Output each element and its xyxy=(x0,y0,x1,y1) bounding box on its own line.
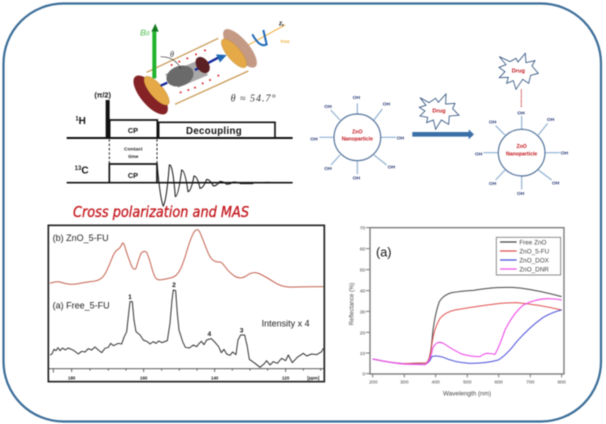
1H label: 1 xyxy=(75,117,79,123)
x axis xyxy=(49,369,324,373)
gray sample tube xyxy=(165,62,208,88)
peak numbers xyxy=(128,282,244,338)
spectrum frame xyxy=(48,225,324,382)
right OH labels: OH xyxy=(489,119,497,125)
x axis labels: 600 xyxy=(494,379,503,385)
right nanoparticle spokes xyxy=(483,116,560,189)
13C CP box xyxy=(109,164,157,183)
x axis labels: [ppm] xyxy=(307,375,320,380)
left nanoparticle circle xyxy=(334,114,381,161)
FID signal xyxy=(157,165,270,206)
black free 5-FU trace xyxy=(50,290,323,367)
x axis labels: 180 xyxy=(68,375,76,380)
peak numbers: 3 xyxy=(240,327,244,334)
contact time label: Contact xyxy=(124,146,143,152)
pi/2 label: (π/2) xyxy=(94,90,111,99)
peak numbers: 4 xyxy=(207,331,211,338)
right OH labels: OH xyxy=(552,180,560,186)
right nanoparticle label: ZnO xyxy=(516,144,527,150)
pulse sequence xyxy=(67,90,293,206)
x axis labels: 700 xyxy=(526,379,535,385)
right OH labels: OH xyxy=(547,117,555,123)
legend: ZnO_DNR xyxy=(519,266,549,273)
coil dots xyxy=(171,49,219,93)
B0 label: B0 xyxy=(140,28,150,38)
CP label upper: CP xyxy=(128,126,138,135)
right nanoparticle circle xyxy=(498,129,545,176)
x axis labels: 500 xyxy=(463,379,472,385)
y axis labels xyxy=(360,226,366,378)
left end cap xyxy=(128,70,174,120)
green B0 arrow xyxy=(148,32,160,78)
theta label: θ xyxy=(170,50,174,59)
rotation arrow xyxy=(252,30,267,45)
contact time guide lines xyxy=(109,139,157,164)
left nanoparticle spokes xyxy=(319,103,396,174)
x axis labels: 400 xyxy=(431,379,440,385)
right OH labels: OH xyxy=(517,191,525,197)
y axis labels: 20 xyxy=(360,330,366,336)
left nanoparticle label: ZnO xyxy=(352,129,362,135)
peak numbers: 1 xyxy=(128,294,132,301)
ZnO DNR curve xyxy=(373,299,562,365)
theta arc xyxy=(161,57,181,69)
magic angle value: θ ≈ 54.7° xyxy=(231,94,276,105)
axis ticks xyxy=(366,228,562,377)
right drug starburst xyxy=(499,53,538,89)
block arrow xyxy=(412,129,474,139)
y axis labels: 0 xyxy=(363,372,366,378)
right nanoparticle label: Nanoparticle xyxy=(506,151,537,157)
red title: Cross polarization and MAS xyxy=(73,203,249,221)
Free ZnO curve xyxy=(373,287,562,364)
x axis labels xyxy=(68,375,320,380)
red ZnO 5-FU trace xyxy=(50,230,323,287)
right inner disc xyxy=(217,35,251,71)
ZnO 5-FU curve xyxy=(373,303,562,364)
left drug starburst xyxy=(419,94,459,129)
13C label: 13 xyxy=(75,166,82,172)
x axis labels: 120 xyxy=(282,375,290,380)
legend: ZnO_5-FU xyxy=(519,248,550,255)
trace label b: (b) ZnO_5-FU xyxy=(53,233,109,243)
left OH labels: OH xyxy=(353,176,360,182)
contact time label: time xyxy=(128,154,139,160)
x axis title: Wavelength (nm) xyxy=(443,390,491,397)
1H baseline xyxy=(67,135,293,141)
y axis labels: 40 xyxy=(360,289,366,295)
right OH labels xyxy=(475,110,568,197)
blue arrow head xyxy=(216,54,227,62)
axis label: z, xyxy=(278,19,284,28)
x axis labels: 200 xyxy=(369,379,378,385)
y axis labels: 10 xyxy=(360,351,366,357)
y axis labels: 50 xyxy=(360,268,366,274)
decoupling box xyxy=(159,122,275,138)
y axis labels: 30 xyxy=(360,309,366,315)
green arrow head xyxy=(151,24,159,32)
axis line xyxy=(248,25,285,45)
CP label lower: CP xyxy=(128,171,138,180)
pi/2 pulse xyxy=(106,100,110,138)
right OH labels: OH xyxy=(489,181,497,187)
blue rotor axis xyxy=(161,57,220,86)
left OH labels: OH xyxy=(383,102,390,108)
x axis labels: 140 xyxy=(211,375,219,380)
y axis labels: 60 xyxy=(360,247,366,253)
left nanoparticle label: Nanoparticle xyxy=(342,137,373,143)
decoupling label: Decoupling xyxy=(186,126,242,137)
legend: Free ZnO xyxy=(519,239,546,246)
legend: ZnO_DOX xyxy=(519,257,550,264)
dark rotor ring xyxy=(193,54,213,76)
x axis labels: 800 xyxy=(557,379,566,385)
NMR spectrum xyxy=(48,225,324,382)
rotation speed label: vrot xyxy=(280,38,290,45)
reflectance chart xyxy=(349,226,566,397)
x axis labels: 160 xyxy=(140,375,148,380)
x axis labels: 300 xyxy=(400,379,409,385)
lower double arrow xyxy=(175,71,248,104)
1H CP box xyxy=(110,120,157,138)
x axis labels xyxy=(369,379,566,385)
ZnO diagram xyxy=(310,53,568,197)
y axis title: Reflectance (%) xyxy=(349,283,355,325)
13C baseline xyxy=(67,180,293,185)
panel letter: (a) xyxy=(376,246,391,260)
left OH labels: OH xyxy=(388,165,395,171)
left OH labels: OH xyxy=(397,135,404,141)
right OH labels: OH xyxy=(475,151,483,157)
right OH labels: OH xyxy=(517,110,525,116)
13C label: C xyxy=(81,165,89,176)
left OH labels xyxy=(310,95,404,182)
ZnO DOX curve xyxy=(373,310,562,364)
y axis labels: 70 xyxy=(360,226,366,232)
plot frame xyxy=(370,228,564,374)
1H label: H xyxy=(79,116,86,127)
right end cap xyxy=(218,24,262,72)
left OH labels: OH xyxy=(310,136,318,142)
peak numbers: 2 xyxy=(172,282,176,289)
intensity label: Intensity x 4 xyxy=(262,318,310,328)
left drug label: Drug xyxy=(432,109,446,115)
left OH labels: OH xyxy=(324,104,332,110)
left OH labels: OH xyxy=(353,95,360,101)
dotted bond xyxy=(520,89,523,107)
legend xyxy=(496,237,561,275)
gray sample xyxy=(163,62,197,90)
left inner disc xyxy=(140,73,173,109)
right OH labels: OH xyxy=(561,151,568,157)
MAS rotor diagram xyxy=(128,19,290,120)
trace label a: (a) Free_5-FU xyxy=(53,300,110,310)
upper double arrow xyxy=(147,38,218,72)
left OH labels: OH xyxy=(324,166,332,172)
right drug label: Drug xyxy=(512,68,525,74)
